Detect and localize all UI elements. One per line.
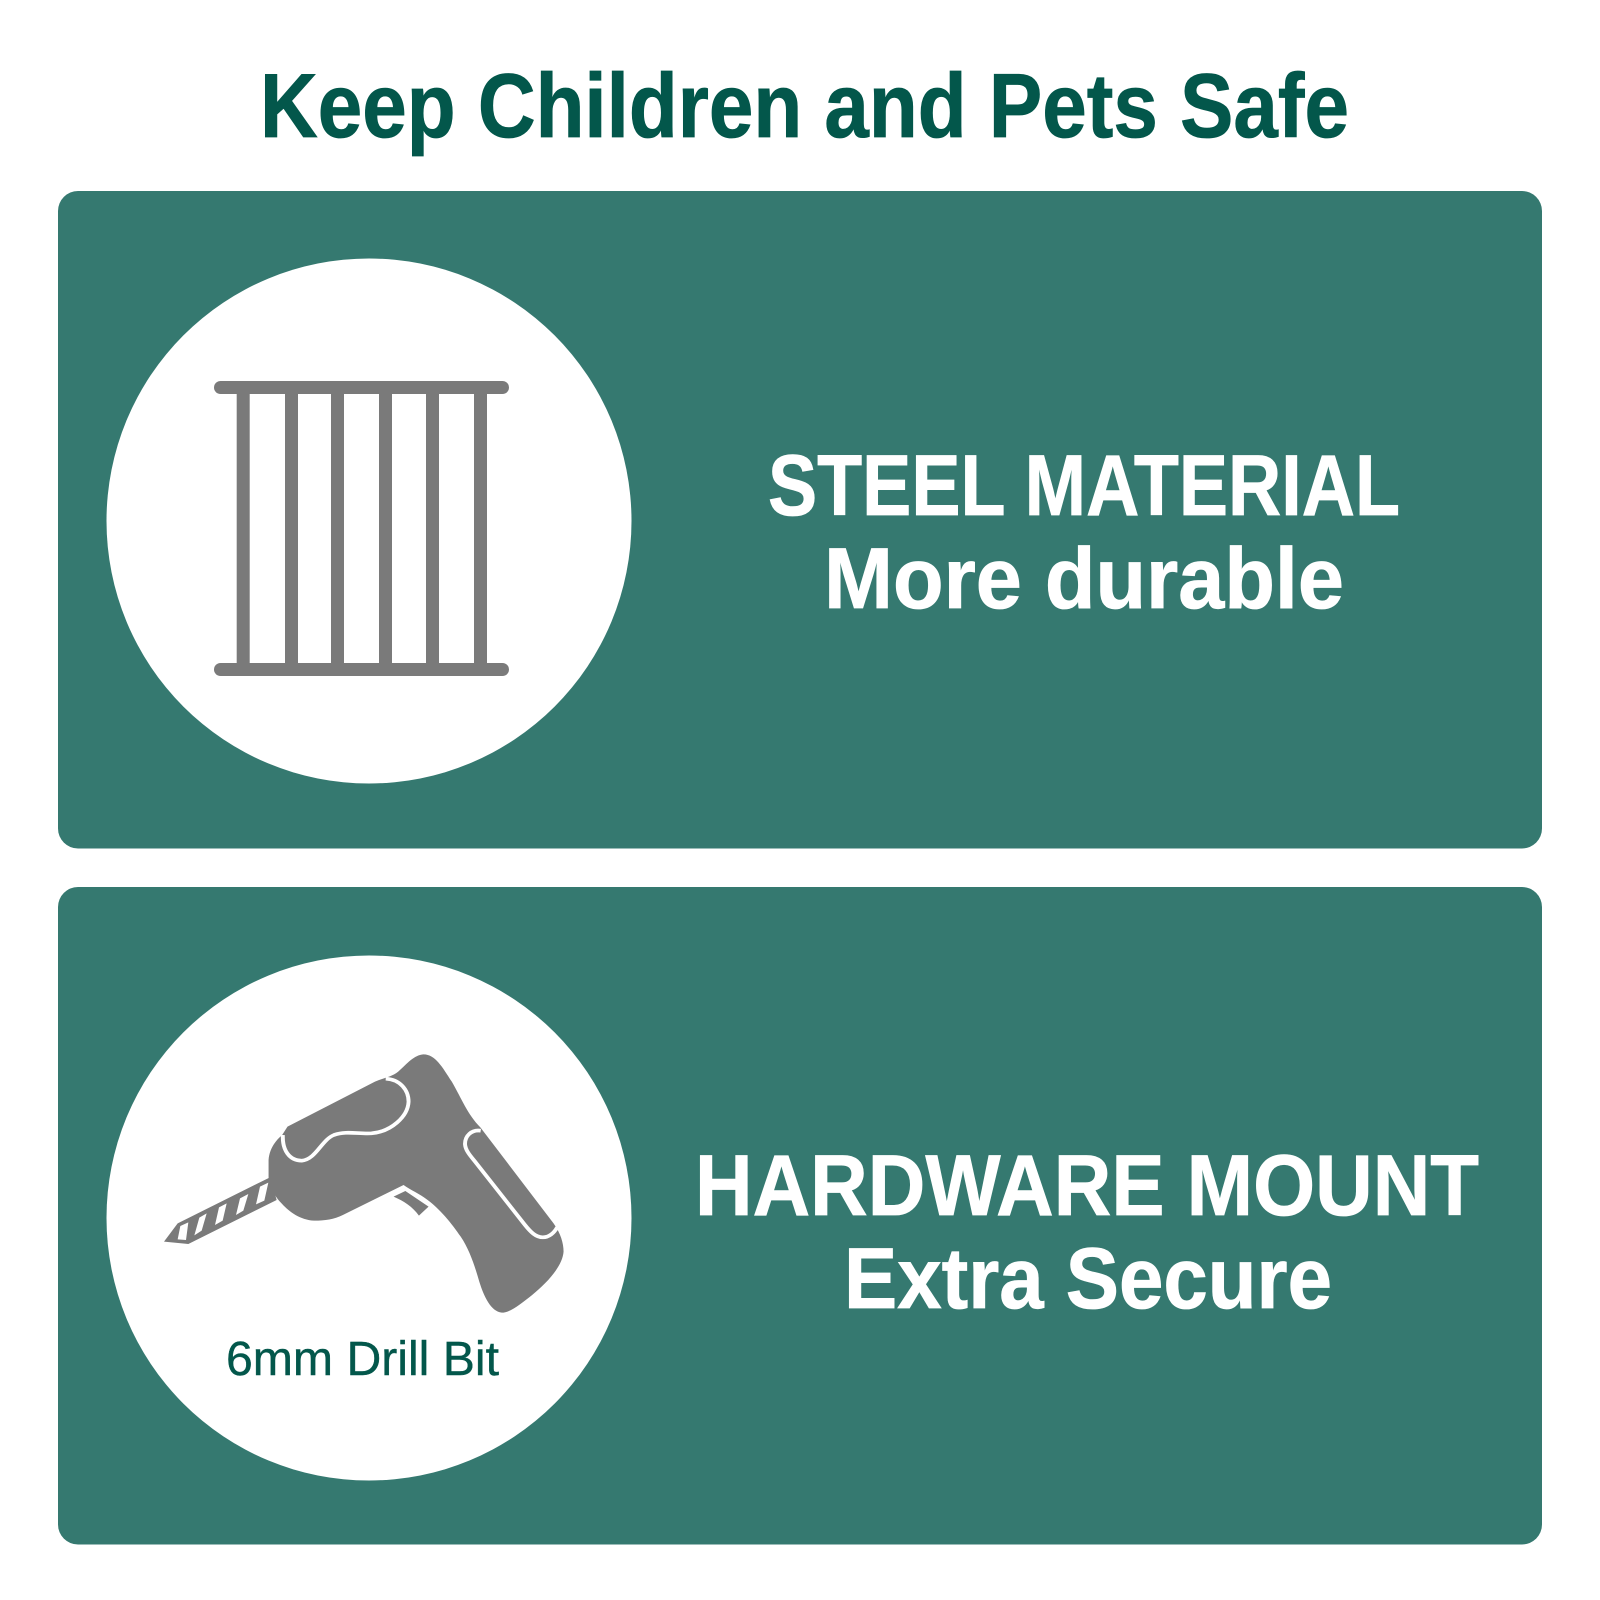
subheading: extra secure: Extra Secure [844, 1231, 1332, 1327]
subheading: more durable: More durable [824, 531, 1344, 627]
title: Keep Children and Pets Safe [260, 56, 1349, 157]
icon: gate [214, 381, 509, 676]
panel background [58, 191, 1542, 848]
icon label: 6mm Drill Bit [226, 1333, 499, 1386]
icon circle [106, 956, 632, 1480]
drill body [269, 1054, 564, 1313]
panel background [58, 887, 1542, 1544]
icon circle [106, 258, 632, 784]
heading: steel material: STEEL MATERIAL [768, 438, 1400, 534]
panel: steel material [58, 191, 1542, 848]
icon: drill [164, 1054, 564, 1313]
heading: hardware mount: HARDWARE MOUNT [695, 1138, 1479, 1234]
drill bit [164, 1177, 277, 1244]
panel: hardware mount [58, 887, 1542, 1544]
